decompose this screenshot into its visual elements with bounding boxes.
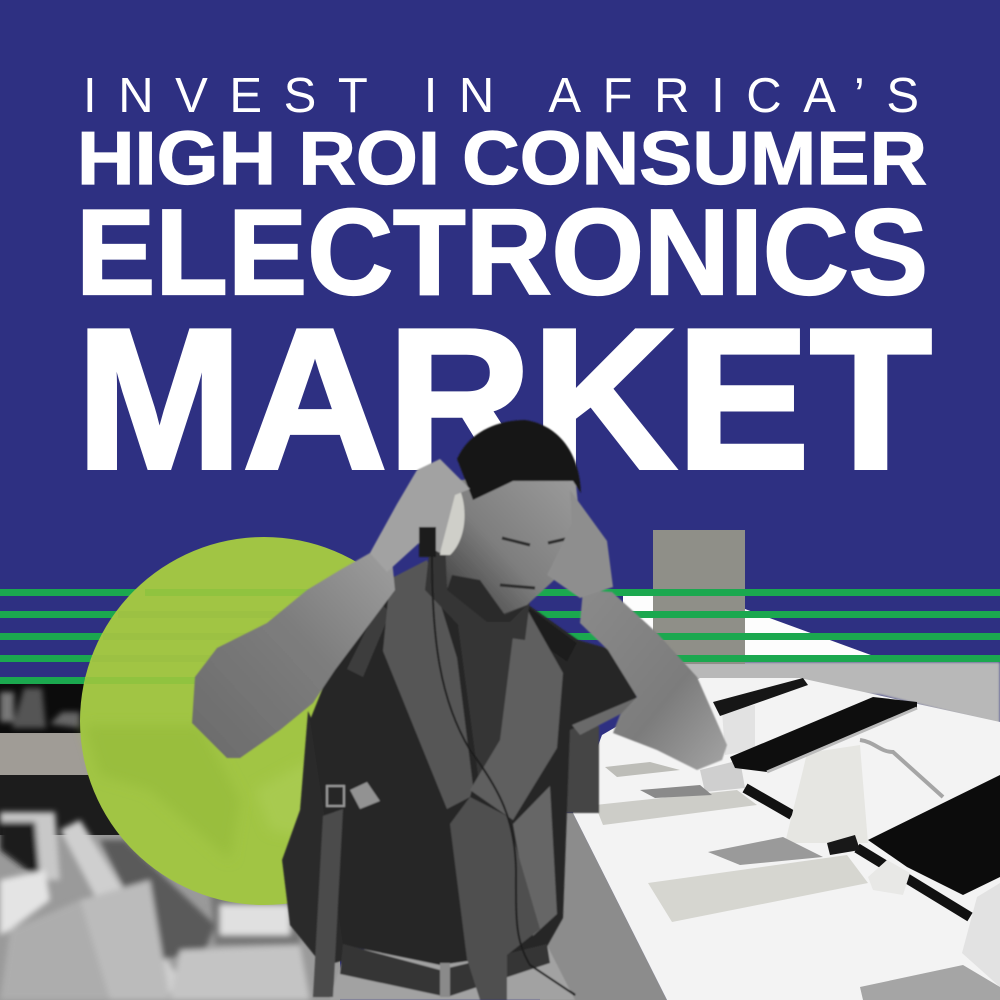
hanging garment bbox=[555, 726, 599, 813]
shadow upper bbox=[640, 785, 712, 798]
title line 4: MARKET bbox=[76, 288, 932, 511]
beard bbox=[447, 575, 527, 622]
shirt lit panel bbox=[513, 786, 557, 936]
store items on display bbox=[595, 678, 1000, 1000]
tablet edge bbox=[767, 708, 917, 772]
man bbox=[192, 420, 727, 1000]
stand clip bbox=[827, 835, 860, 855]
price card upper bbox=[595, 790, 757, 825]
tablet small bbox=[713, 678, 808, 716]
stand right edge bbox=[962, 883, 1000, 987]
circle overlay texture bbox=[84, 589, 435, 860]
backpack bbox=[282, 711, 345, 966]
back stand bbox=[722, 705, 755, 755]
shadow lower bbox=[708, 837, 823, 865]
backpack strap down bbox=[313, 809, 343, 997]
table shadow bottom right bbox=[860, 965, 1000, 1000]
hand right bbox=[547, 490, 613, 598]
coiled cable bbox=[860, 740, 943, 797]
jeans bbox=[330, 945, 575, 1000]
torso bbox=[310, 575, 638, 965]
green stripes behind circle bbox=[0, 589, 1000, 684]
buckle bbox=[327, 786, 344, 806]
neck bbox=[425, 545, 530, 640]
scarf right bbox=[470, 609, 563, 820]
grey display box bbox=[653, 530, 745, 664]
photo: store background right bbox=[540, 595, 1000, 1000]
small stand base bbox=[700, 760, 745, 792]
price card lower bbox=[648, 855, 868, 922]
right arm bbox=[580, 590, 727, 770]
small cards bbox=[605, 762, 680, 777]
plug bbox=[419, 527, 436, 557]
sleeve highlight bbox=[572, 698, 638, 735]
belt bbox=[340, 944, 550, 997]
photo: store background left bbox=[0, 684, 340, 1000]
belt loop bbox=[440, 963, 450, 997]
scarf left bbox=[383, 560, 473, 809]
plastic clip bbox=[350, 782, 380, 809]
backpack shoulder strap bbox=[347, 602, 390, 677]
headphone bbox=[440, 490, 465, 555]
title line 1: INVEST IN AFRICA’S bbox=[83, 69, 919, 123]
hand left bbox=[370, 459, 470, 572]
headphone cable bbox=[432, 557, 575, 995]
tablet large bbox=[730, 697, 917, 772]
right shoulder strap bbox=[527, 606, 577, 662]
title bbox=[76, 69, 932, 511]
title line 2: HIGH ROI CONSUMER bbox=[77, 116, 927, 200]
green circle bbox=[80, 537, 448, 905]
title line 3: ELECTRONICS bbox=[76, 184, 928, 320]
left arm bbox=[192, 540, 395, 758]
face bbox=[445, 475, 580, 620]
black rail bbox=[745, 788, 970, 917]
scarf knot bbox=[450, 797, 540, 1000]
hair bbox=[457, 420, 581, 500]
tablet right bbox=[868, 775, 1000, 895]
inner t-shirt bbox=[458, 625, 513, 790]
eyes and mouth bbox=[500, 538, 570, 588]
white clip bbox=[868, 860, 910, 895]
stand large bbox=[785, 745, 868, 843]
